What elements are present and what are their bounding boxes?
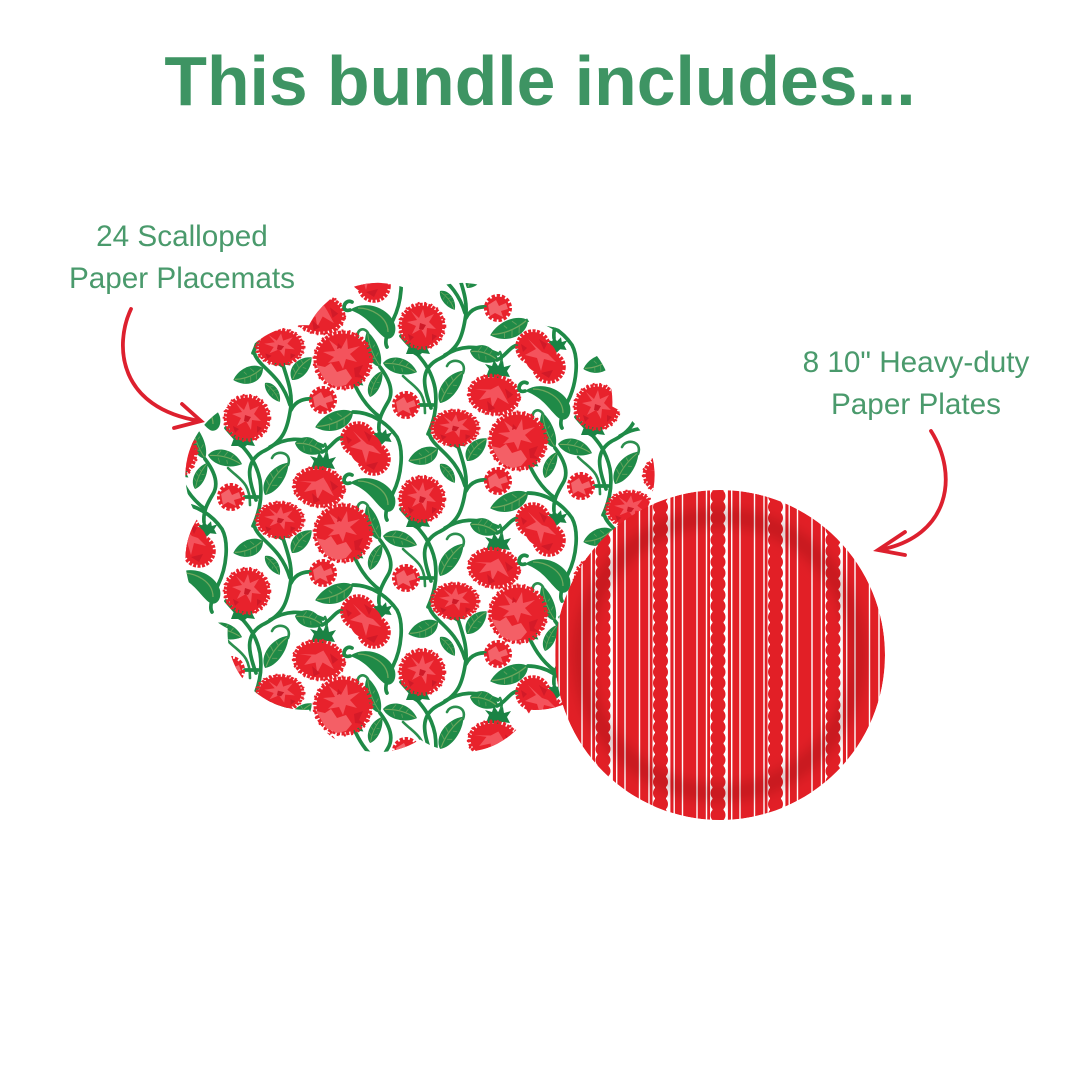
scalloped floral placemat xyxy=(185,282,655,752)
label: plates: Paper Plates xyxy=(831,388,1001,421)
arrow: to placemats xyxy=(123,309,201,428)
striped red paper plate xyxy=(555,490,885,820)
label: placemats xyxy=(69,220,295,295)
title: This bundle includes... xyxy=(164,42,916,120)
label: plates: 8 10" Heavy-duty xyxy=(803,346,1030,379)
label: placemats: Paper Placemats xyxy=(69,262,295,295)
arrow: to plates xyxy=(878,431,946,555)
label: placemats: 24 Scalloped xyxy=(96,220,268,253)
label: plates xyxy=(803,346,1030,421)
